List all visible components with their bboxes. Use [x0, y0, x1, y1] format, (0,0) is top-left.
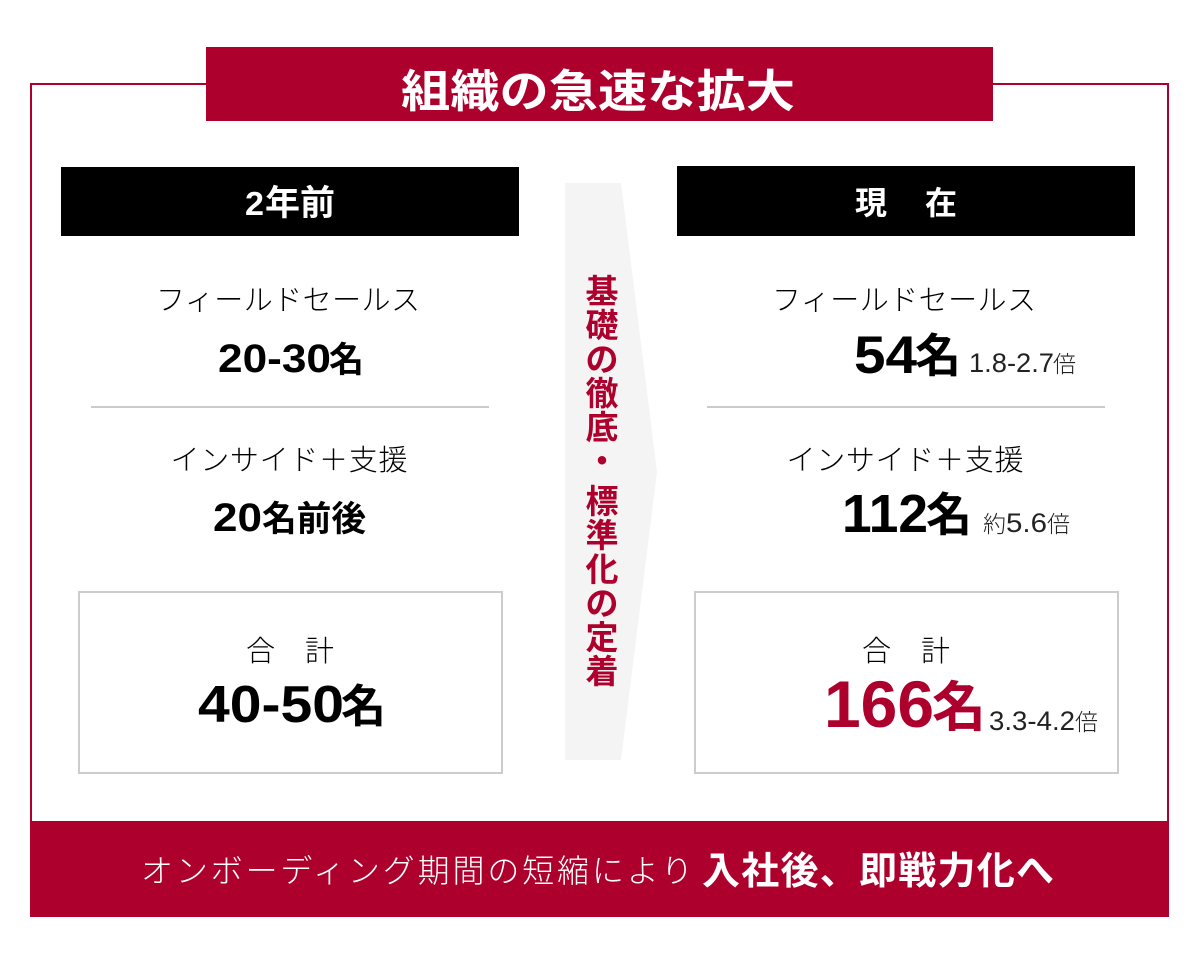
bottom banner: 入社後、即戦力化へ [702, 840, 1054, 895]
field sales label: フィールドセールス [156, 277, 420, 319]
arrow: foundation: 基 [586, 265, 618, 313]
total box [79, 592, 502, 773]
total box: 40-50 [198, 676, 344, 734]
heading: current: 現 在 [855, 178, 957, 224]
total box [695, 592, 1118, 773]
total box: 名 [341, 670, 386, 735]
total box: 名 [932, 663, 986, 742]
inside sales label: インサイド＋支援 [786, 437, 1024, 479]
inside sales value: 20 [213, 496, 262, 540]
field sales value: 54 [854, 326, 918, 385]
outer frame [31, 84, 1168, 864]
total box: 倍 [1075, 703, 1098, 737]
arrow: foundation: 底 [586, 401, 618, 449]
arrow: foundation: 定 [586, 611, 618, 659]
arrow: foundation: ・ [586, 435, 618, 483]
inside sales label: インサイド＋支援 [170, 437, 408, 479]
inside sales multiplier: 倍 [1047, 505, 1070, 539]
arrow: foundation: の [586, 333, 618, 381]
inside sales multiplier: 約 [983, 505, 1006, 539]
inside sales value: 112 [842, 484, 928, 544]
inside sales value [213, 491, 366, 542]
total box: 3.3-4.2 [989, 706, 1075, 736]
arrow: foundation: 徹 [586, 367, 618, 415]
inside sales multiplier: 5.6 [1006, 508, 1047, 538]
heading: 2 years ago: 年前 [265, 175, 335, 226]
inside sales value [842, 479, 972, 545]
bottom banner: オンボーディング期間の短縮により [141, 846, 693, 892]
total box: 合 計 [862, 628, 950, 670]
arrow: foundation: の [586, 577, 618, 625]
inside sales value: 名前後 [262, 491, 366, 542]
panel: two years ago [61, 167, 519, 773]
field sales value [218, 332, 364, 383]
field sales value: 20-30 [218, 337, 331, 381]
arrow: foundation [565, 183, 657, 760]
arrow: foundation: 標 [586, 475, 618, 523]
total box: 合 計 [246, 628, 334, 670]
field sales value [854, 320, 961, 386]
field sales value: 名 [329, 332, 364, 383]
field sales value: 名 [915, 320, 961, 386]
arrow: foundation: 着 [586, 645, 618, 693]
heading: 2 years ago [61, 167, 519, 236]
inside sales multiplier [983, 505, 1070, 539]
field sales multiplier: 倍 [1053, 345, 1076, 379]
bottom banner [30, 821, 1169, 917]
heading: 2 years ago: 2 [245, 185, 264, 222]
panel: current [677, 166, 1135, 773]
arrow: foundation: 準 [586, 509, 618, 557]
field sales multiplier: 1.8-2.7 [969, 348, 1054, 378]
heading: current [677, 166, 1135, 236]
title banner: 組織の急速な拡大 [401, 55, 795, 120]
field sales label: フィールドセールス [772, 277, 1036, 319]
total box: 166 [824, 667, 934, 741]
field sales multiplier [969, 345, 1076, 379]
arrow: foundation: 礎 [586, 299, 618, 347]
inside sales value: 名 [926, 479, 972, 545]
arrow: foundation: 化 [586, 543, 618, 591]
title banner [206, 47, 993, 121]
